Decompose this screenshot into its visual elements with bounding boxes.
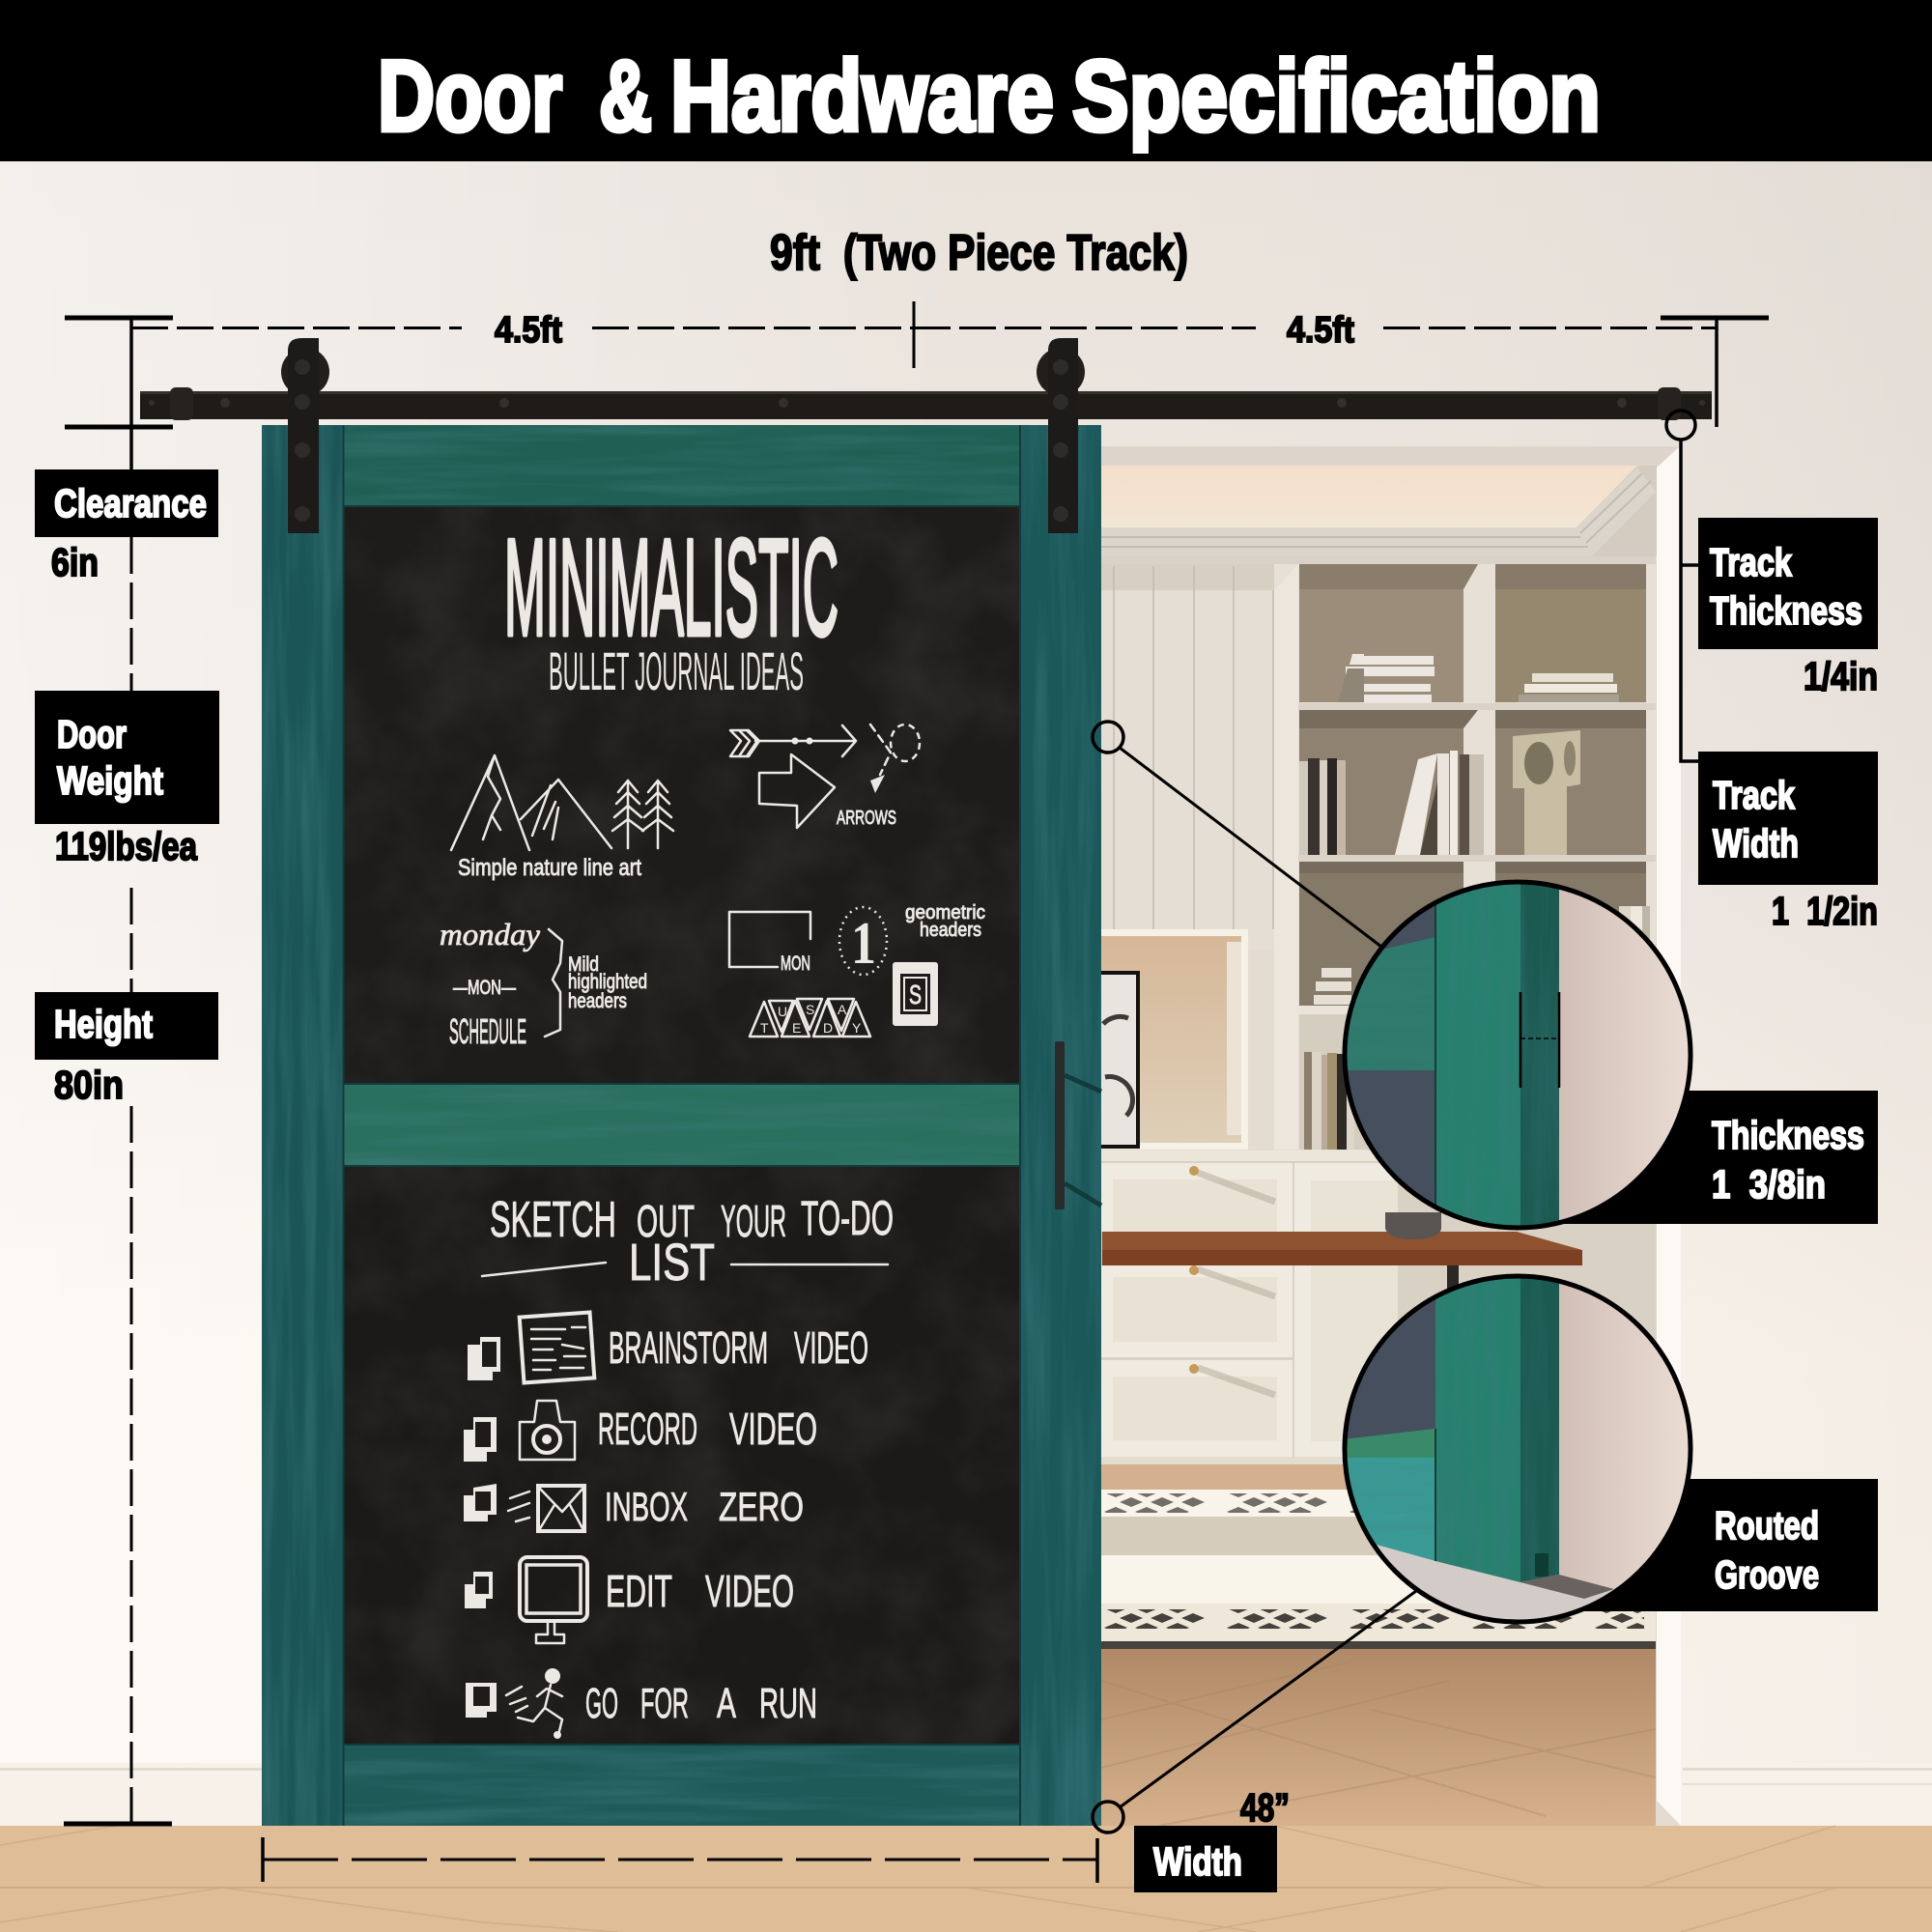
rug and floor [1101,1457,1681,1826]
baseboards [0,1763,1932,1826]
to-do row: go for a run: RUN [759,1680,817,1727]
left half label: 4.5ft [495,310,562,351]
chalk art: schedule headers: monday [440,917,541,952]
chalk art: geometric headers: geometric [905,902,985,923]
chalk art: schedule headers: highlighted [568,971,647,993]
right half label: 4.5ft [1287,310,1354,351]
text: MINIMALISTIC [504,511,838,665]
ceiling cove [1101,466,1657,556]
to-do row: go for a run [466,1668,817,1739]
framed art [1101,929,1248,1150]
chalk art: geometric headers: headers [920,920,981,941]
right hanger [1037,338,1085,533]
bookcase [1274,564,1656,1154]
label panel: door thickness: Thickness [1712,1113,1864,1157]
chalk art: geometric headers: MON [781,952,810,975]
cabinets [1101,1151,1656,1460]
chalk art: schedule headers [440,917,647,1051]
chalk art: geometric headers: S [909,980,922,1009]
title bar: & [599,41,652,153]
crown molding [1101,468,1656,556]
total track label: 9ft (Two Piece Track) [770,225,1188,281]
label: track width: Track [1713,773,1795,817]
wood grain [262,425,344,1826]
chalk art: geometric headers: D [823,1020,833,1036]
soffit [1101,446,1678,468]
to-do row: go for a run: FOR [640,1680,689,1727]
track stopper right [1658,387,1681,420]
to-do row: edit video [465,1557,794,1643]
chalk art: geometric headers: A [838,1002,847,1017]
chalk art: to-do heading: SKETCH [490,1192,616,1248]
chalk art: mountains: Simple nature line art [458,855,641,881]
label panel: door thickness: 1 3/8in [1712,1162,1826,1207]
chalk art: schedule headers: Mild [568,953,599,976]
panelled wall [1101,564,1275,951]
callout: door thickness detail [1345,882,1690,1230]
callout leader lines [1093,722,1416,1833]
rails [344,425,1020,506]
books and sculpture [1299,654,1650,1150]
chalk art: geometric headers: E [792,1020,801,1036]
label: track width: Width [1713,821,1799,866]
label: clearance: 6in [51,540,99,584]
to-do row: brainstorm video: VIDEO [794,1322,868,1373]
label: track width [1698,752,1878,933]
to-do row: edit video: EDIT [606,1566,672,1616]
left hanger [281,338,329,533]
left and right stiles [262,425,344,1826]
to-do row: inbox zero [464,1484,804,1531]
chalk art: mountains [451,755,673,881]
label: door weight [35,691,219,868]
to-do row: inbox zero: INBOX [605,1484,688,1529]
chalk art: geometric headers: T [760,1020,769,1036]
label: height: Height [54,1002,153,1046]
label: width: Width [1153,1839,1242,1884]
barn door [262,425,1101,1826]
to-do row: edit video: VIDEO [705,1566,794,1616]
chalk art: schedule headers: SCHEDULE [449,1011,526,1051]
label: clearance: Clearance [54,481,207,526]
chalk art: schedule headers: —MON— [453,977,516,999]
chalk art: geometric headers: S [806,1002,814,1017]
text: BULLET JOURNAL IDEAS [549,640,804,701]
height dimension line [64,537,172,1824]
label panel: routed groove: Routed [1715,1503,1819,1548]
label: door weight: Weight [57,758,163,803]
title bar [0,0,1932,161]
track dimension lines [65,301,1769,469]
barn door track [140,387,1712,420]
chalk art: to-do heading: YOUR [721,1196,786,1246]
chalkboard panels [344,506,1020,1084]
chalk art: minimalistic heading [504,511,838,701]
label: track thickness: 1/4in [1804,654,1878,698]
chalk art: to-do heading: LIST [629,1234,715,1292]
to-do row: go for a run: GO [585,1680,618,1727]
doorway: room interior [1101,446,1681,1826]
door jamb [1657,448,1681,1826]
title bar: Specification [1072,41,1601,153]
width dimension line [263,1837,1097,1883]
chalk art: geometric headers: Y [852,1020,862,1036]
to-do row: record video [464,1401,817,1462]
chalk art: geometric headers: 1 [851,911,876,977]
chalk art: schedule headers: headers [568,990,627,1012]
chalk art: geometric headers: U [778,1004,787,1019]
chalk art: to-do heading: OUT [637,1196,695,1246]
label: track thickness: Track [1710,540,1792,584]
to-do row: brainstorm video [468,1313,868,1382]
chalk art: arrows: ARROWS [837,808,896,829]
to-do row: brainstorm video: BRAINSTORM [609,1322,768,1373]
label: width [1134,1785,1290,1892]
chalk art: geometric headers [729,902,985,1037]
label panel: door thickness [1546,1091,1878,1224]
title bar: Door [378,41,562,153]
main wood floor [0,1826,1932,1932]
label: height: 80in [54,1063,124,1107]
label: track thickness [1698,518,1878,698]
table with bowl [1102,1212,1582,1289]
track stopper left [170,387,193,420]
label: door weight: Door [57,712,127,756]
chalk art: to-do heading: TO-DO [801,1191,894,1245]
door handle [1055,1041,1101,1209]
to-do row: record video: RECORD [598,1404,697,1454]
label: height [35,992,218,1107]
chalk art: arrows [730,724,920,829]
chalk art: to-do heading [482,1191,894,1292]
title bar: Hardware [670,41,1054,153]
to-do row: record video: VIDEO [729,1404,817,1454]
label: track width: 1 1/2in [1772,889,1878,933]
label: width: 48” [1240,1785,1290,1830]
to-do row: go for a run: A [717,1680,736,1727]
label panel: routed groove [1546,1479,1878,1611]
label: track thickness: Thickness [1710,588,1862,633]
label: clearance [35,469,218,584]
to-do row: inbox zero: ZERO [719,1484,804,1529]
label panel: routed groove: Groove [1715,1552,1819,1597]
callout: routed groove detail [1345,1276,1690,1642]
track leader lines [1666,411,1699,761]
label: door weight: 119lbs/ea [55,824,198,868]
